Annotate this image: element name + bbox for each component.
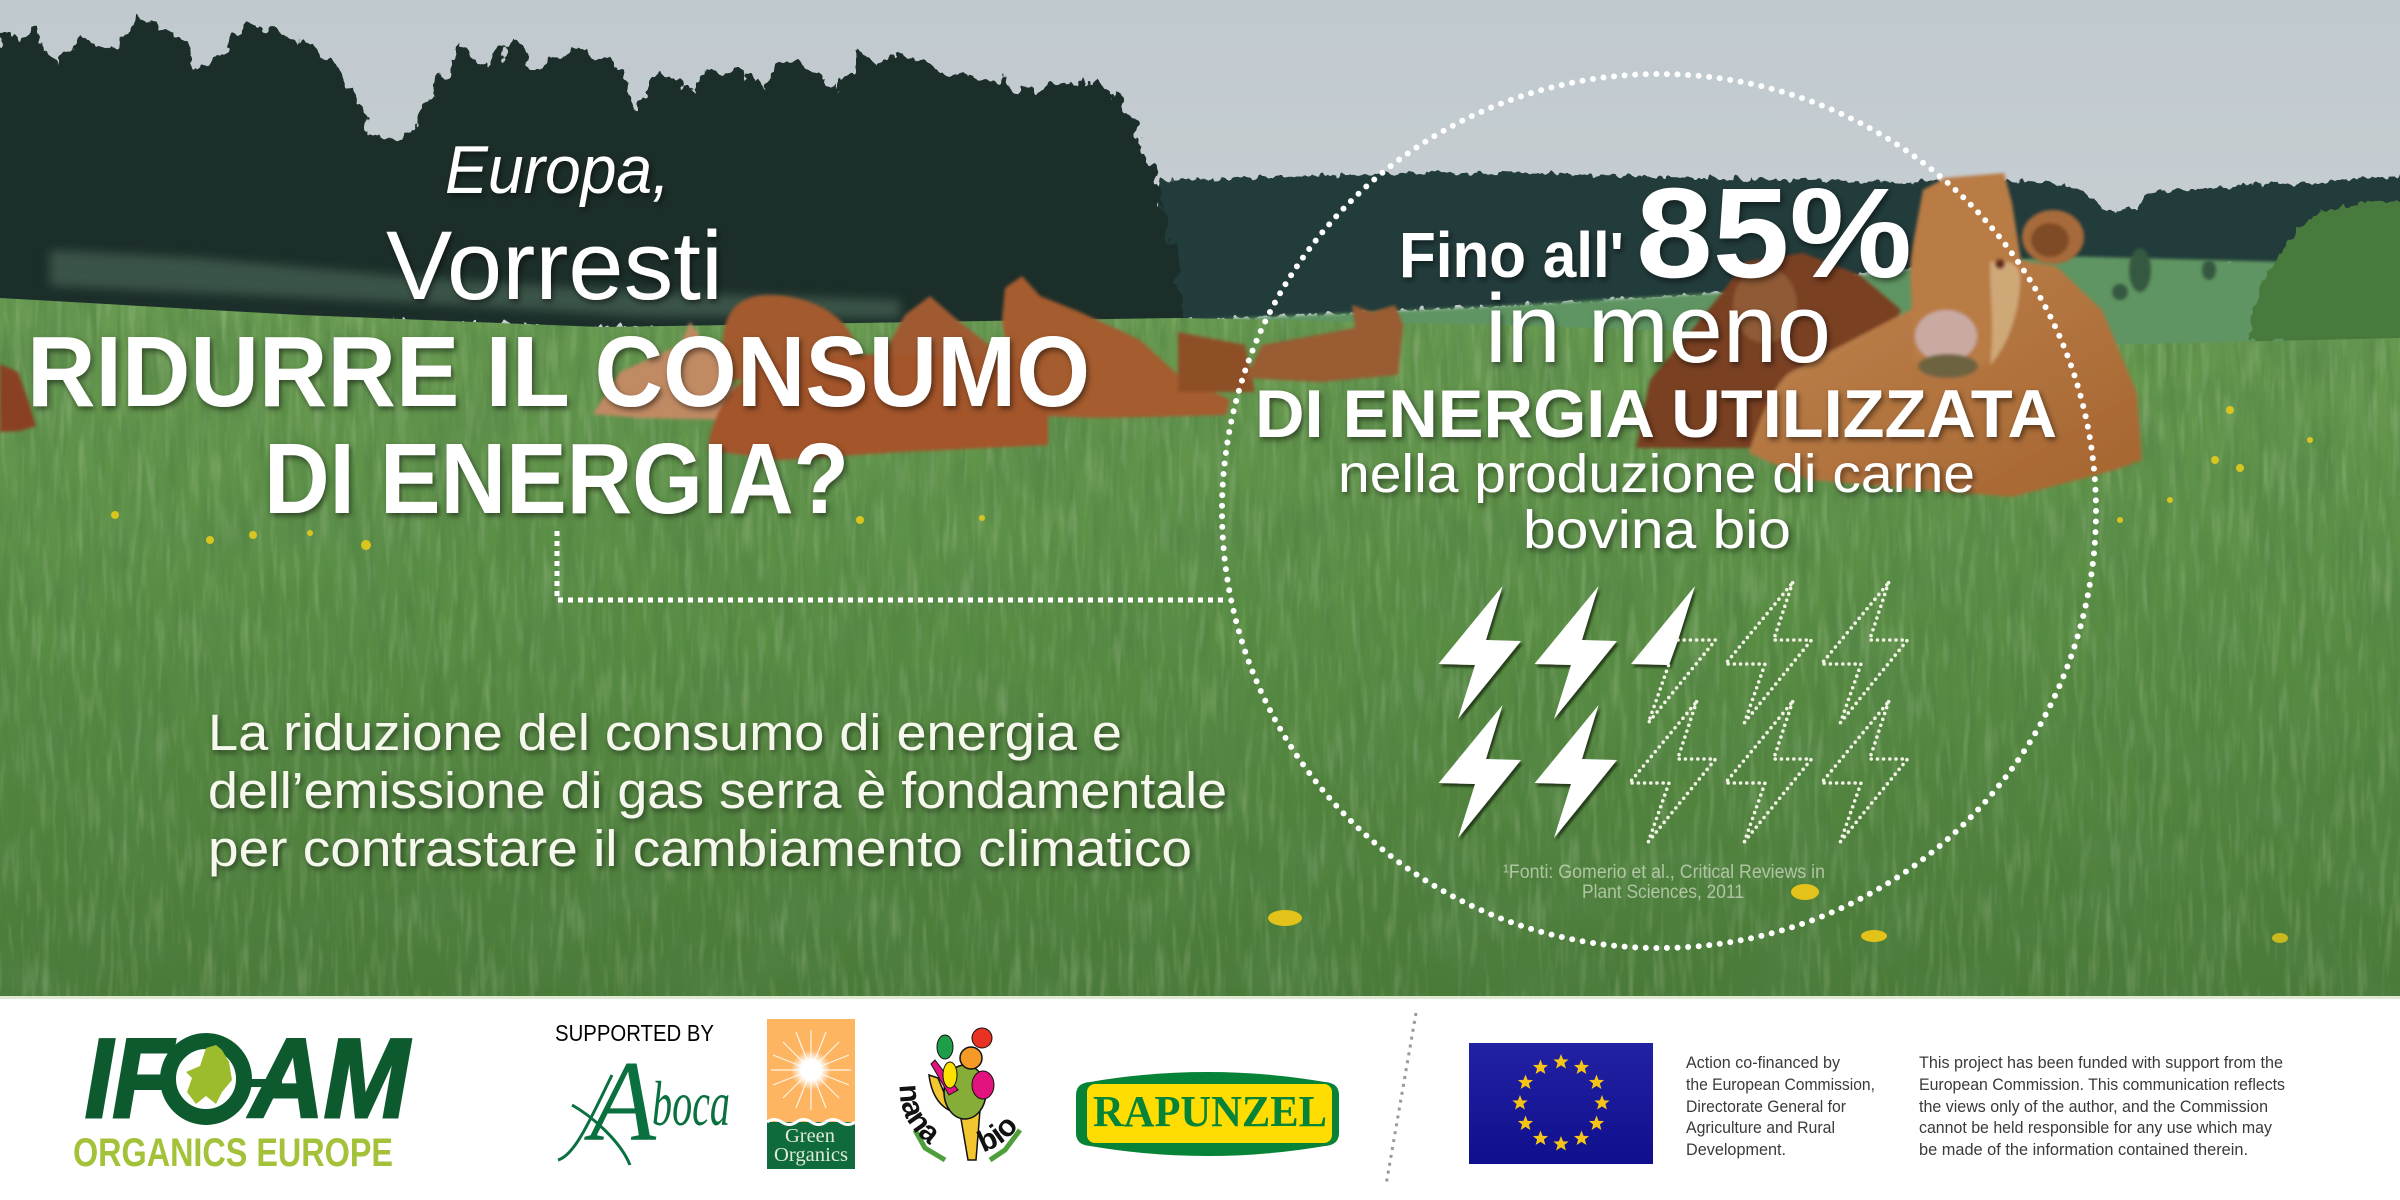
footer band [0,999,2400,1200]
co-financing note: Directorate General for [1686,1097,1846,1116]
disclaimer note: the views only of the author, and the Commission [1919,1097,2268,1116]
logo: nana bio: nana [900,1086,936,1145]
cows [0,173,2142,497]
dotted connector to circle [557,531,1225,600]
wave [767,1120,855,1124]
logo: Aboca: A [583,1038,657,1165]
production line 2: bovina bio [1523,500,1791,560]
heading: left question [27,132,1090,535]
brand text [774,1125,848,1166]
co-financing note [1686,1053,1875,1159]
IFOAM lettering [85,1016,411,1141]
disclaimer note [1919,1053,2285,1159]
Europa line: Europa, [445,132,670,208]
disclaimer note: European Commission. This communication reflects [1919,1075,2285,1094]
di energia utilizzata: DI ENERGIA UTILIZZATA [1255,376,2057,452]
distant forest [1160,172,2400,322]
middle distance field [1160,256,2400,350]
Fino all': Fino all' [1399,219,1624,291]
logo: Rapunzel: RAPUNZEL [1093,1087,1327,1136]
dotted circle [1222,74,2096,948]
bush on the right [2248,201,2400,342]
brand text: Organics [774,1144,848,1166]
brand text on arc [900,1085,1028,1155]
logo: IFOAM Organics Europe [73,1016,411,1175]
disclaimer note: be made of the information contained therein. [1919,1140,2248,1159]
cows behind the headline [593,322,740,420]
far left cow [0,364,36,432]
logo: Aboca [558,1038,730,1165]
source note [1503,862,1825,903]
logo: Green Organics [767,1019,855,1169]
body text paragraph [208,704,1227,877]
juggler figure [929,1075,980,1160]
disclaimer note: This project has been funded with support from the [1919,1053,2283,1072]
cows on the right [1178,332,1255,392]
grass tufts [915,1130,1020,1160]
co-financing note: Action co-financed by [1686,1053,1840,1072]
co-financing note: the European Commission, [1686,1075,1875,1094]
icon: energy bolts, 2.5 of 10 less [1439,583,1908,842]
dandelion flowers [111,406,2313,943]
in meno: in meno [1485,274,1831,383]
sun [771,1030,851,1110]
supported by label: SUPPORTED BY [555,1020,714,1046]
logo: nana bio [900,1028,1022,1162]
tree line [0,21,1178,332]
logo: Aboca: boca [652,1068,730,1139]
small shrubs in far field [2112,248,2216,300]
production line 1: nella produzione di carne [1338,444,1975,504]
logo: nana bio: bio [976,1120,1016,1152]
body text paragraph: per contrastare il cambiamento climatico [208,820,1192,877]
grass texture [0,298,2400,998]
main meadow [0,298,2400,999]
dotted outline bolts [1629,583,1908,842]
dotted divider [1386,1013,1416,1185]
disclaimer note: cannot be held responsible for any use which may [1919,1118,2272,1137]
big cow looking at camera [1749,173,2142,497]
statistic text in circle [1255,162,2057,560]
headline line 1: RIDURRE IL CONSUMO [27,316,1090,428]
logo: Rapunzel [1076,1072,1339,1156]
body text paragraph: La riduzione del consumo di energia e [208,704,1122,761]
source note: Plant Sciences, 2011 [1582,882,1744,903]
85 percent: 85% [1636,162,1912,305]
cow behind the big cow [1636,253,1901,448]
co-financing note: Development. [1686,1140,1786,1159]
Vorresti line: Vorresti [386,211,723,320]
brand text: Green [785,1125,835,1147]
globe ring [168,1041,244,1117]
filled bolts [1439,586,1695,838]
EU flag [1469,1043,1653,1164]
IFOAM lettering: IF [85,1016,175,1141]
IFOAM lettering: AM [247,1016,411,1141]
Europe map [186,1045,232,1104]
Organics Europe: ORGANICS EUROPE [73,1131,393,1175]
headline line 2: DI ENERGIA? [264,423,849,535]
body text paragraph: dell’emissione di gas serra è fondamentale [208,762,1227,819]
light gaps under the trees [50,250,900,318]
co-financing note: Agriculture and Rural [1686,1118,1835,1137]
source note: ¹Fonti: Gomerio et al., Critical Reviews in [1503,862,1825,883]
